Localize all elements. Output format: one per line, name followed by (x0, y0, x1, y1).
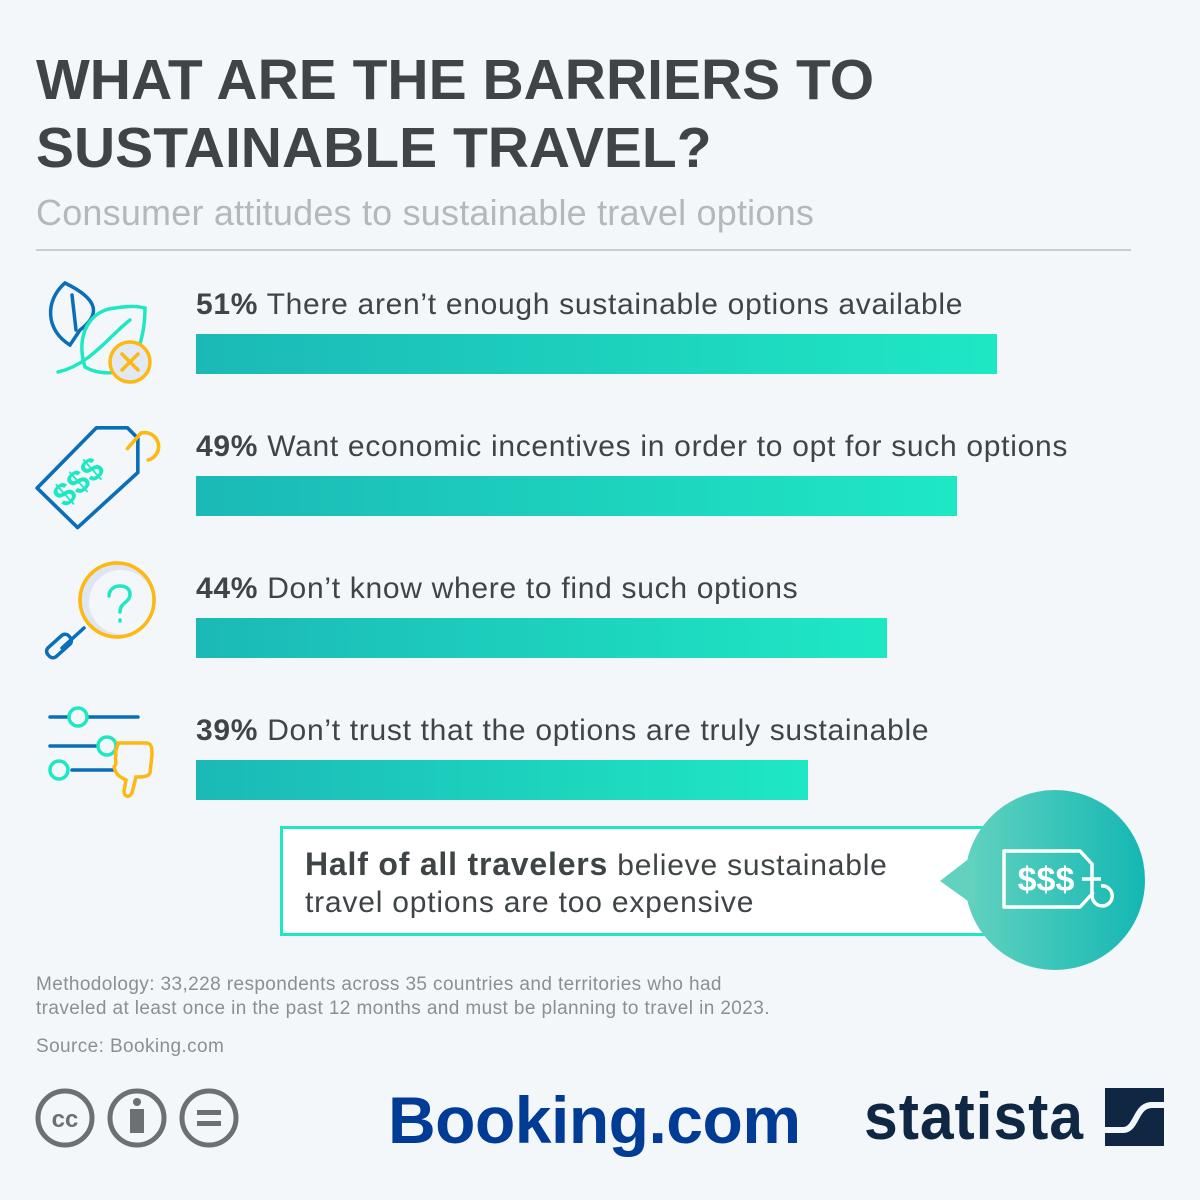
label 4: 39% Don’t trust that the options are truly sustainable (196, 714, 929, 747)
methodology: Methodology: 33,228 respondents across 35 countries and territories who had (36, 974, 722, 995)
label 2: 49% Want economic incentives in order to opt for such options (196, 430, 1068, 463)
bar 1 (196, 334, 997, 374)
icon: sliders thumbs down (48, 706, 154, 798)
callout text (305, 846, 888, 919)
cc icons: cc (52, 1106, 78, 1133)
methodology: traveled at least once in the past 12 months and must be planning to travel in 2023. (36, 998, 770, 1019)
callout (280, 790, 1145, 970)
methodology (36, 974, 770, 1019)
logo: statista: statista (864, 1079, 1084, 1153)
logo: Booking.com: Booking.com (388, 1083, 801, 1157)
cc icons (36, 1088, 238, 1148)
subtitle: Consumer attitudes to sustainable travel options (36, 192, 814, 233)
bar 4 (196, 760, 808, 800)
title: WHAT ARE THE BARRIERS TO (36, 48, 874, 112)
callout text: Half of all travelers believe sustainable (305, 846, 888, 882)
icon: price tag (35, 426, 160, 530)
label 3: 44% Don’t know where to find such options (196, 572, 798, 605)
callout circle icon (940, 790, 1145, 970)
bar 3 (196, 618, 887, 658)
icon: magnifier question (44, 561, 156, 660)
callout text: travel options are too expensive (305, 886, 754, 919)
label 1: 51% There aren’t enough sustainable options available (196, 288, 963, 321)
icon: leaf with x (48, 280, 152, 384)
callout circle icon: $$$ (1018, 861, 1074, 899)
source: Source: Booking.com (36, 1036, 224, 1057)
title: SUSTAINABLE TRAVEL? (36, 116, 712, 180)
callout box (280, 826, 1006, 936)
bar 2 (196, 476, 957, 516)
icon: price tag: $$$ (46, 450, 112, 515)
title (36, 48, 874, 180)
